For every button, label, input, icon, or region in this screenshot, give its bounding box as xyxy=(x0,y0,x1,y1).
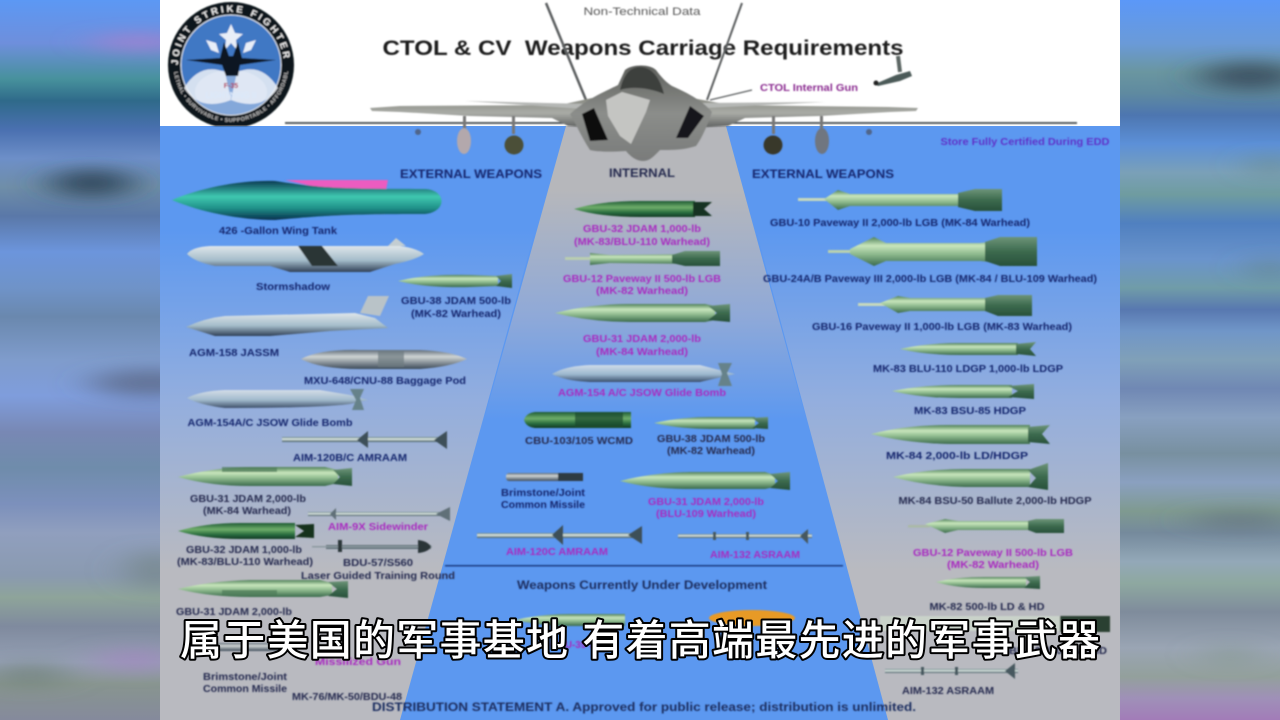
weapon: GBU-12 internal xyxy=(563,251,721,297)
weapon: GBU-10 xyxy=(770,189,1030,229)
page header xyxy=(382,6,904,60)
weapon: AIM-132 right xyxy=(885,663,1018,697)
weapon: AIM-132 internal: AIM-132 ASRAAM xyxy=(710,549,800,561)
weapon: AIM-120C xyxy=(477,525,642,558)
weapon: MK-82 xyxy=(930,576,1045,613)
weapon: GBU-12 internal: (MK-82 Warhead) xyxy=(596,285,688,297)
icon: F-35 aircraft front view xyxy=(370,3,918,161)
weapon: GBU-31 left lower xyxy=(176,580,348,618)
weapon: MK-83 BLU-110 xyxy=(873,342,1063,375)
divider: under development xyxy=(445,565,843,566)
weapon: GBU-32 internal xyxy=(574,201,712,248)
weapon: BDU-57 training round: Laser Guided Training Round xyxy=(301,570,455,582)
weapon: Brimstone internal: Brimstone/Joint xyxy=(501,487,586,499)
weapon: under development green: GBU-39 SDB xyxy=(550,639,610,651)
weapon: AIM-132 right: AIM-132 ASRAAM xyxy=(902,685,994,697)
weapon: MXU baggage pod: MXU-648/CNU-88 Baggage Pod xyxy=(304,375,466,387)
panel: left blurred side background xyxy=(0,0,210,720)
weapon: GBU-31 left: (MK-84 Warhead) xyxy=(203,505,291,517)
weapon: AGM-154 JSOW left: AGM-154A/C JSOW Glide Bomb xyxy=(188,417,352,429)
title: CTOL & CV Weapons Carriage Requirements xyxy=(382,37,904,60)
weapon: GBU-38 internal: (MK-82 Warhead) xyxy=(667,445,755,457)
weapon: BDU-57 training round xyxy=(301,540,455,582)
weapon: storm shadow xyxy=(187,238,424,293)
fuselage xyxy=(570,66,712,161)
weapon: GBU-24 xyxy=(763,237,1097,285)
weapon: GBU-32 left: (MK-83/BLU-110 Warhead) xyxy=(177,556,313,568)
weapon: MK-83 BLU-110: MK-83 BLU-110 LDGP 1,000-lb LDGP xyxy=(873,363,1063,375)
weapon: GBU-31 internal: GBU-31 JDAM 2,000-lb xyxy=(583,333,701,345)
weapon: Brimstone left lower: Common Missile xyxy=(203,683,287,695)
weapon: wing tank xyxy=(172,180,442,237)
label: MK-76: MK-76/MK-50/BDU-48 xyxy=(292,691,402,703)
weapon: CBU-103/105 WCMD: CBU-103/105 WCMD xyxy=(525,435,633,447)
weapon: MK-84 LD xyxy=(871,425,1050,462)
label: store certification note: Store Fully Certified During EDD xyxy=(940,136,1110,148)
weapon: AGM-154 JSOW internal xyxy=(552,363,735,399)
weapon: AIM-9X xyxy=(308,507,450,533)
weapon: GBU-32 left: GBU-32 JDAM 1,000-lb xyxy=(186,544,302,556)
caption: Chinese subtitle: 属于美国的军事基地 有着高端最先进的军事武器 xyxy=(180,617,1100,664)
weapon: MK-84 LD: MK-84 2,000-lb LD/HDGP xyxy=(886,450,1028,462)
text: distribution statement: DISTRIBUTION STATEMENT A. Approved for public release; distribution is unlimited. xyxy=(372,702,916,714)
weapon: GBU-38 left: GBU-38 JDAM 500-lb xyxy=(401,295,511,307)
weapon: GBU-32 internal: GBU-32 JDAM 1,000-lb xyxy=(583,223,701,235)
heading: right external weapons: EXTERNAL WEAPONS xyxy=(752,167,894,181)
weapon: GBU-32 left xyxy=(177,523,314,568)
heading: internal: INTERNAL xyxy=(609,166,675,180)
weapon: AGM-158 JASSM: AGM-158 JASSM xyxy=(189,347,279,359)
weapon: GBU-12 right xyxy=(908,519,1073,571)
weapon: GBU-31 left: GBU-31 JDAM 2,000-lb xyxy=(190,493,306,505)
weapon: MK-84 BSU-50 xyxy=(893,463,1092,507)
weapon: GBU-16: GBU-16 Paveway II 1,000-lb LGB (MK-83 Warhead) xyxy=(812,321,1072,333)
weapon: MK-82: MK-82 500-lb LD & HD xyxy=(930,601,1045,613)
weapon: AIM-9X: AIM-9X Sidewinder xyxy=(328,521,428,533)
weapon: wing tank: 426 -Gallon Wing Tank xyxy=(219,225,337,237)
weapon: MK-83 BSU-85 xyxy=(892,384,1034,417)
weapon: storm shadow: Stormshadow xyxy=(256,281,331,293)
weapon: right lower dark store: CBU-103/105 WCMD xyxy=(1001,645,1107,657)
weapon: GBU-38 internal: GBU-38 JDAM 500-lb xyxy=(657,433,765,445)
icon: Joint Strike Fighter logo xyxy=(166,0,296,128)
weapon: GBU-12 right: GBU-12 Paveway II 500-lb LGB xyxy=(913,547,1073,559)
weapon: GBU-31 internal: (MK-84 Warhead) xyxy=(596,346,688,358)
weapon: GBU-38 internal xyxy=(654,417,768,457)
weapon: MK-83 BSU-85: MK-83 BSU-85 HDGP xyxy=(914,405,1026,417)
icon: Joint Strike Fighter logo: LIGHTNING II xyxy=(206,91,256,100)
label: missilized gun: Missilized Gun xyxy=(315,656,401,668)
weapon: Brimstone left lower xyxy=(203,643,288,695)
weapon: under development green xyxy=(515,614,625,651)
weapon: GBU-31 internal xyxy=(555,304,730,358)
icon: Joint Strike Fighter logo: F-35 xyxy=(224,83,238,90)
weapon: BDU-57 training round: BDU-57/S560 xyxy=(343,557,413,569)
weapon: GBU-31 left xyxy=(178,467,352,517)
weapon: GBU-12 internal: GBU-12 Paveway II 500-lb LGB xyxy=(563,273,721,285)
weapon: Brimstone internal: Common Missile xyxy=(501,499,585,511)
panel: right blurred side background xyxy=(1120,0,1280,720)
text: non-technical data: Non-Technical Data xyxy=(584,6,702,18)
weapon: AIM-120 left xyxy=(282,431,447,464)
weapon: AIM-120 left: AIM-120B/C AMRAAM xyxy=(293,452,407,464)
icon: internal gun xyxy=(874,56,912,86)
weapon: GBU-31 left lower: GBU-31 JDAM 2,000-lb xyxy=(176,606,292,618)
heading: left external weapons: EXTERNAL WEAPONS xyxy=(400,167,542,181)
heading: weapons under development: Weapons Currently Under Development xyxy=(517,578,767,592)
weapon: CBU-103/105 WCMD xyxy=(524,412,633,447)
weapon: GBU-12 right: (MK-82 Warhead) xyxy=(947,559,1039,571)
weapon: GBU-31 BLU-109 xyxy=(620,472,790,520)
weapon: GBU-10: GBU-10 Paveway II 2,000-lb LGB (MK-84 Warhead) xyxy=(770,217,1030,229)
weapon: right lower dark store xyxy=(880,616,1110,657)
weapon: AIM-132 internal xyxy=(678,529,812,561)
weapon: GBU-24: GBU-24A/B Paveway III 2,000-lb LGB (MK-84 / BLU-109 Warhead) xyxy=(763,273,1097,285)
weapon: GBU-31 BLU-109: GBU-31 JDAM 2,000-lb xyxy=(648,496,764,508)
panel: main chart background xyxy=(160,0,1120,720)
weapon: under development orange xyxy=(709,610,795,626)
horizontal rule under header xyxy=(285,122,1077,124)
weapon: Brimstone left lower: Brimstone/Joint xyxy=(203,671,288,683)
weapon: AIM-120C: AIM-120C AMRAAM xyxy=(506,546,608,558)
weapon: GBU-31 BLU-109: (BLU-109 Warhead) xyxy=(656,508,756,520)
icon: Joint Strike Fighter logo: JOINT STRIKE FIGHTER xyxy=(170,4,292,66)
icon: wing pylon stores xyxy=(415,116,872,154)
weapon: AGM-154 JSOW internal: AGM-154 A/C JSOW Glide Bomb xyxy=(558,387,726,399)
weapon: GBU-38 left xyxy=(398,274,512,320)
weapon: GBU-16 xyxy=(812,295,1072,333)
label: CTOL internal gun: CTOL Internal Gun xyxy=(760,82,858,94)
weapon: MK-84 BSU-50: MK-84 BSU-50 Ballute 2,000-lb HDGP xyxy=(898,495,1092,507)
weapon: AGM-154 JSOW left xyxy=(187,389,368,429)
weapon: AGM-158 JASSM xyxy=(186,296,389,359)
weapon: Brimstone internal xyxy=(501,473,586,511)
weapon: GBU-32 internal: (MK-83/BLU-110 Warhead) xyxy=(574,236,710,248)
weapon: MXU baggage pod xyxy=(301,350,467,387)
weapon: GBU-38 left: (MK-82 Warhead) xyxy=(411,308,501,320)
